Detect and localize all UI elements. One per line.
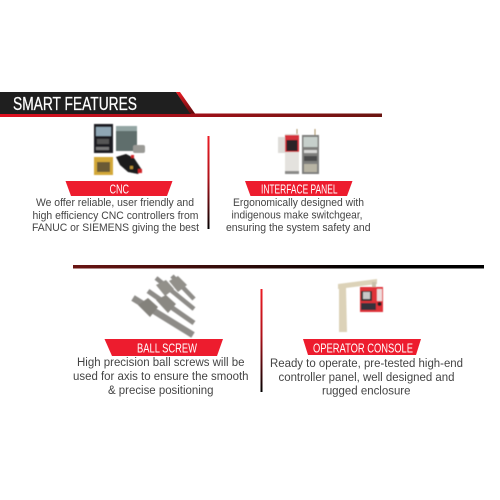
text: CNC description: high efficiency CNC controllers from: [32, 210, 198, 222]
ribbon: interface panel: INTERFACE PANEL: [261, 182, 338, 196]
text: interface panel description: Ergonomically designed with: [233, 197, 364, 209]
panel: interface panel: [226, 129, 370, 234]
text: CNC description: We offer reliable, user friendly and: [36, 197, 194, 209]
text: operator console description: [270, 356, 463, 398]
ribbon: CNC: CNC: [110, 182, 129, 196]
ribbon: ball screw: [104, 339, 223, 356]
text: interface panel description: indigenous make switchgear,: [232, 210, 362, 222]
icon: CNC controllers: [94, 124, 145, 175]
icon: operator console on arm: [338, 279, 383, 332]
text: CNC description: [32, 197, 200, 234]
panel: operator console: [270, 279, 463, 398]
panel: ball screw: [73, 276, 248, 397]
icon: ball screws: [133, 276, 194, 335]
ribbon: interface panel: [245, 181, 352, 196]
text: operator console description: Ready to operate, pre-tested high-end: [270, 356, 463, 370]
panel: CNC: [32, 124, 200, 234]
text: CNC description: FANUC or SIEMENS giving the best: [32, 222, 200, 234]
ribbon: operator console: OPERATOR CONSOLE: [313, 340, 413, 356]
text: operator console description: rugged enclosure: [322, 384, 411, 398]
divider: bottom row: [260, 289, 262, 392]
text: operator console description: controller panel, well designed and: [278, 370, 454, 384]
header banner: [0, 92, 382, 117]
ribbon: operator console: [303, 339, 421, 356]
text: ball screw description: used for axis to ensure the smooth: [73, 369, 248, 383]
title: SMART FEATURES: [13, 93, 137, 114]
text: ball screw description: & precise positioning: [108, 383, 214, 397]
ribbon: CNC: [66, 181, 172, 196]
middle rule: [73, 265, 484, 268]
icon: electrical cabinets: [278, 129, 319, 174]
text: ball screw description: [73, 355, 248, 397]
ribbon: ball screw: BALL SCREW: [137, 340, 198, 356]
text: ball screw description: High precision ball screws will be: [77, 355, 245, 369]
text: interface panel description: [226, 197, 370, 234]
divider: top row: [208, 136, 210, 229]
text: interface panel description: ensuring the system safety and: [226, 222, 370, 234]
